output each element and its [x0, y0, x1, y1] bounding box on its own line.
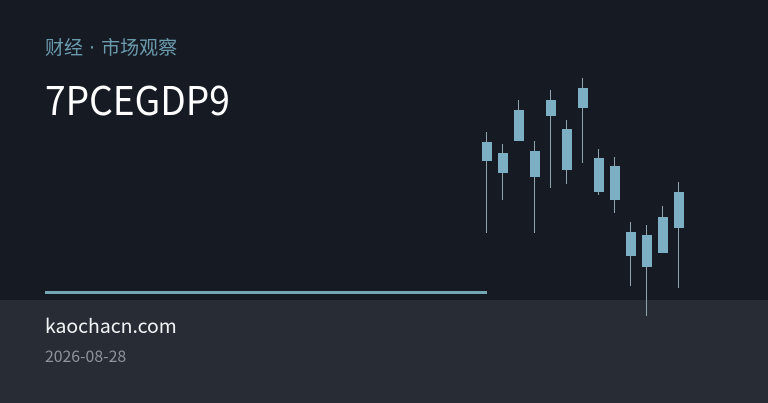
accent rule	[45, 291, 487, 294]
site name: kaochacn.com	[45, 310, 177, 339]
kicker label: 财经 · 市场观察	[45, 37, 177, 59]
title: 7PCEGDP9	[45, 70, 230, 127]
footer band	[0, 300, 768, 403]
date: 2026-08-28	[45, 344, 126, 366]
